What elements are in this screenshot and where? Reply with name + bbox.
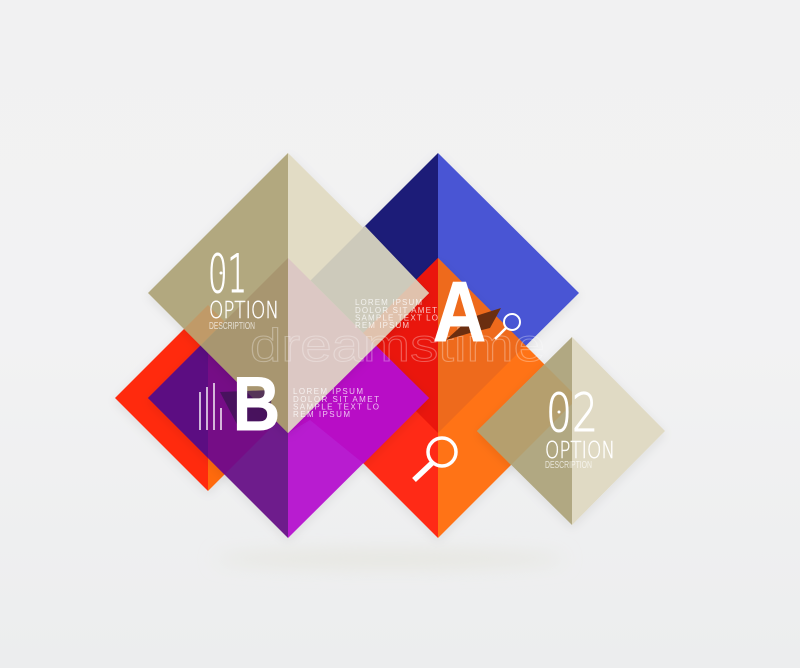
heading: option 01: OPTION bbox=[209, 298, 279, 324]
number 01 bbox=[208, 244, 247, 305]
letter B: B bbox=[233, 362, 280, 447]
letter A: A bbox=[433, 265, 486, 360]
text block: lorem lower: LOREM IPSUM bbox=[293, 387, 363, 396]
watermark: dreamstime bbox=[250, 319, 545, 371]
text block: lorem upper: SAMPLE TEXT LO bbox=[355, 314, 438, 322]
text block: lorem lower: DOLOR SIT AMET bbox=[293, 395, 379, 404]
panel: purple diamond bbox=[148, 258, 429, 538]
description 02: DESCRIPTION bbox=[545, 460, 592, 471]
text block: lorem upper: DOLOR SIT AMET bbox=[355, 306, 437, 315]
ground shadow bbox=[215, 550, 565, 568]
number 02: 02 bbox=[546, 383, 598, 444]
text block: lorem upper bbox=[355, 298, 438, 330]
icon: vertical bars bbox=[200, 383, 221, 430]
icon: large magnifier bbox=[414, 438, 456, 480]
heading: option 02: OPTION bbox=[545, 438, 615, 464]
description 01: DESCRIPTION bbox=[209, 321, 255, 332]
icon: small magnifier bbox=[495, 314, 520, 339]
text block: lorem lower bbox=[293, 387, 379, 419]
text block: lorem lower: SAMPLE TEXT LO bbox=[293, 402, 379, 412]
panel: red and orange diamond bbox=[298, 258, 578, 538]
text block: lorem upper: LOREM IPSUM bbox=[355, 298, 422, 307]
letter B shadow bbox=[220, 390, 272, 430]
text block: lorem upper: REM IPSUM bbox=[355, 321, 409, 330]
panel: small red diamond bbox=[115, 305, 301, 491]
panel: option 02 diamond bbox=[477, 337, 665, 525]
text block: lorem lower: REM IPSUM bbox=[293, 410, 350, 419]
panel: blue diamond bbox=[298, 153, 579, 433]
number 01: 01 bbox=[208, 244, 247, 305]
panel: option 01 diamond bbox=[148, 153, 429, 433]
letter A shadow bbox=[446, 308, 501, 340]
